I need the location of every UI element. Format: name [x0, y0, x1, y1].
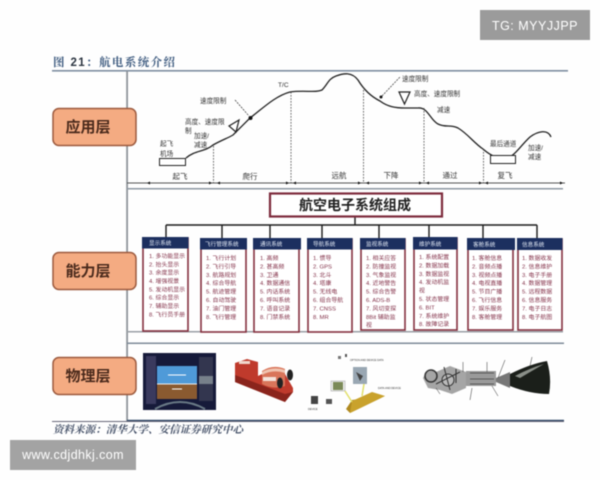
column: cabin: [467, 238, 515, 330]
column: navigation: 5. 无线电: [313, 288, 337, 296]
column: navigation: 3. 北斗: [313, 271, 331, 279]
column: maintenance: 3. 数据监视: [419, 270, 449, 278]
annotations: 制: [185, 126, 192, 135]
panel: application layer: [53, 74, 565, 184]
column: maintenance: 1. 系统配置: [419, 253, 449, 261]
column: surveillance: 7. 风切变探: [366, 304, 396, 312]
annotations: 最后通道: [490, 139, 517, 148]
panel: physical layer: [53, 342, 564, 422]
column: communications: [253, 238, 301, 332]
source rule: [52, 421, 564, 422]
watermark: bottom left: [10, 440, 136, 470]
column: information: 2. 信息维护: [522, 262, 552, 270]
column: communications: 6. 呼叫系统: [260, 296, 290, 304]
annotations: T/C: [278, 82, 289, 89]
phase labels: 通过: [442, 170, 458, 180]
column: communications: 5. 内话系统: [260, 288, 290, 296]
watermark: top right: [480, 10, 590, 40]
annotations: 机场: [160, 149, 174, 158]
image: red equipment: [235, 359, 293, 402]
column: flight management: 7. 油门管理: [206, 304, 236, 312]
column: information: 6. 信息服务: [522, 296, 552, 304]
column: surveillance: 视: [366, 321, 372, 329]
column: flight management: 飞行管理系统: [205, 240, 239, 248]
image: network diagram: OPTION AND DEVICE DATA: [350, 358, 384, 362]
phase labels: 爬行: [242, 171, 258, 181]
annotations: 加速/: [194, 131, 209, 140]
column: maintenance: 视: [419, 287, 425, 295]
annotations: 加速/: [528, 143, 543, 152]
column: information: 5. 远程数据: [522, 288, 552, 296]
annotations: 高度、速度限制: [414, 89, 461, 98]
title: 图 21：航电系统介绍: [53, 55, 176, 69]
label: application layer: 应用层: [65, 118, 111, 136]
column: display: 6. 综合显示: [149, 294, 179, 302]
column: display: 8. 飞行员手册: [149, 310, 185, 318]
column: flight management: 2. 飞行引导: [206, 262, 236, 270]
image: cockpit display: [143, 353, 216, 410]
column: maintenance: 5. 状态管理: [419, 295, 449, 303]
column: information: 信息系统: [522, 240, 545, 248]
column: display: 7. 辅助显示: [149, 302, 179, 310]
column: maintenance: 6. BIT: [419, 305, 435, 311]
annotations: 起飞: [160, 140, 174, 148]
column: surveillance: 监视系统: [366, 240, 389, 248]
column: information: 3. 电子手册: [522, 271, 552, 279]
column: cabin: 8. 客舱管理: [472, 313, 502, 321]
column: flight management: 8. 飞行管理: [206, 313, 236, 321]
column: cabin: 4. 电视直播: [472, 279, 502, 287]
column: maintenance: [413, 237, 458, 330]
column: display: 4. 增强视景: [149, 277, 179, 285]
column: communications: 3. 卫通: [260, 271, 278, 279]
column: navigation: 导航系统: [313, 240, 336, 248]
column: cabin: 3. 视频点播: [472, 271, 502, 279]
column: communications: 8. 门禁系统: [260, 313, 290, 321]
phase labels: 起飞: [172, 172, 188, 181]
constraint markers: [229, 77, 410, 132]
heading box: 航空电子系统组成: [299, 197, 411, 213]
label: physical layer: [53, 358, 136, 394]
column: surveillance: [360, 238, 406, 330]
column: navigation: 4. 塔康: [313, 279, 331, 287]
phase labels: [172, 170, 513, 181]
column: maintenance: 7. 系统维护: [419, 312, 449, 320]
column: communications: 7. 语音记录: [260, 304, 290, 312]
column: navigation: 1. 惯导: [313, 254, 331, 262]
column: navigation: 7. CNSS: [313, 306, 336, 312]
column: flight management: 1. 飞行计划: [206, 254, 236, 262]
column: display: 1. 多功能显示: [149, 252, 185, 260]
column: navigation: 2. GPS: [313, 264, 332, 270]
annotations: 减速: [437, 105, 451, 114]
column: maintenance: 4. 发动机监: [419, 278, 449, 286]
column: maintenance: 维护系统: [419, 240, 442, 248]
column: cabin: 1. 客舱信息: [472, 254, 502, 262]
column: flight management: 4. 综合导航: [206, 279, 236, 287]
column: communications: 1. 高频: [260, 254, 278, 262]
column: flight management: 3. 航路规划: [206, 271, 236, 279]
column: information: 8. 电子航图: [522, 313, 552, 321]
runway landing box: [490, 156, 516, 164]
column: display: [142, 237, 188, 331]
column: display: 5. 发动机显示: [149, 285, 185, 293]
column: surveillance: 3. 气象监视: [366, 271, 396, 279]
column: display: 2. 抬头显示: [149, 260, 179, 268]
column: navigation: 8. MR: [313, 315, 329, 321]
source note: 资料来源：清华大学、安信证券研究中心: [53, 424, 246, 436]
column: cabin: 客舱系统: [473, 240, 496, 248]
label: capability layer: 能力层: [65, 262, 111, 280]
image: network diagram: [308, 354, 401, 413]
column: display: 显示系统: [149, 239, 172, 247]
column: communications: 4. 数据通信: [260, 279, 290, 287]
column: display: 3. 余度显示: [149, 269, 179, 277]
panel: capability layer: [53, 188, 563, 332]
column: cabin: 5. 节目广播: [472, 288, 502, 296]
phase labels: 复飞: [498, 170, 513, 180]
column: surveillance: 8Bit 辅助监: [366, 313, 396, 321]
column: navigation: 6. 组合导航: [313, 296, 343, 304]
annotations: 减速: [194, 140, 208, 149]
column: maintenance: 2. 数据加载: [419, 261, 449, 269]
flight profile curve: [186, 74, 551, 158]
column: information: 1. 数据收发: [522, 254, 552, 262]
phase axis arrows: [127, 182, 565, 184]
column: cabin: 7. 娱乐服务: [472, 304, 502, 312]
runway takeoff box: [160, 158, 186, 166]
annotations: 减速: [528, 152, 542, 161]
watermark: bottom left: www.cdjdhkj.com: [21, 448, 124, 462]
column: flight management: 6. 自动驾驶: [206, 296, 236, 304]
column: cabin: 2. 音频点播: [472, 262, 502, 270]
phase dashed lines: [214, 87, 484, 183]
column: maintenance: 8. 故障记录: [419, 320, 449, 328]
column: surveillance: 1. 相关应答: [366, 254, 396, 262]
label: capability layer: [53, 252, 136, 290]
column: surveillance: 6. ADS-B: [366, 298, 390, 304]
column: surveillance: 2. 防撞监视: [366, 262, 396, 270]
image: rocket engine: [423, 357, 550, 400]
annotations: 速度限制: [402, 74, 429, 83]
column: flight management: 5. 航迹管理: [206, 288, 236, 296]
annotations: 速度限制: [200, 96, 227, 105]
column: navigation: [307, 238, 352, 332]
image: network diagram: DATA AND DEVICE: [378, 386, 401, 390]
column: information: 7. 电子日志: [522, 304, 552, 312]
column: information: 4. 数据管理: [522, 279, 552, 287]
label: physical layer: 物理层: [65, 367, 111, 385]
annotations: [160, 74, 543, 161]
phase labels: 远航: [332, 170, 347, 180]
column: information: [517, 238, 562, 330]
image: network diagram: DEVICE: [308, 407, 318, 411]
column: communications: 通讯系统: [260, 240, 283, 248]
annotations: 高度、速度限: [185, 117, 225, 126]
phase labels: 下降: [384, 170, 399, 180]
column: surveillance: 5. 综合告警: [366, 288, 396, 296]
column: communications: 2. 甚高频: [260, 262, 284, 270]
label: application layer: [53, 108, 136, 146]
heading box: [270, 194, 442, 216]
column: surveillance: 4. 近地警告: [366, 279, 396, 287]
column: cabin: 6. 飞行信息: [472, 296, 502, 304]
org chart connectors: [166, 216, 537, 238]
column: flight management: [200, 238, 247, 332]
watermark: top right: TG: MYYJJPP: [492, 19, 578, 33]
